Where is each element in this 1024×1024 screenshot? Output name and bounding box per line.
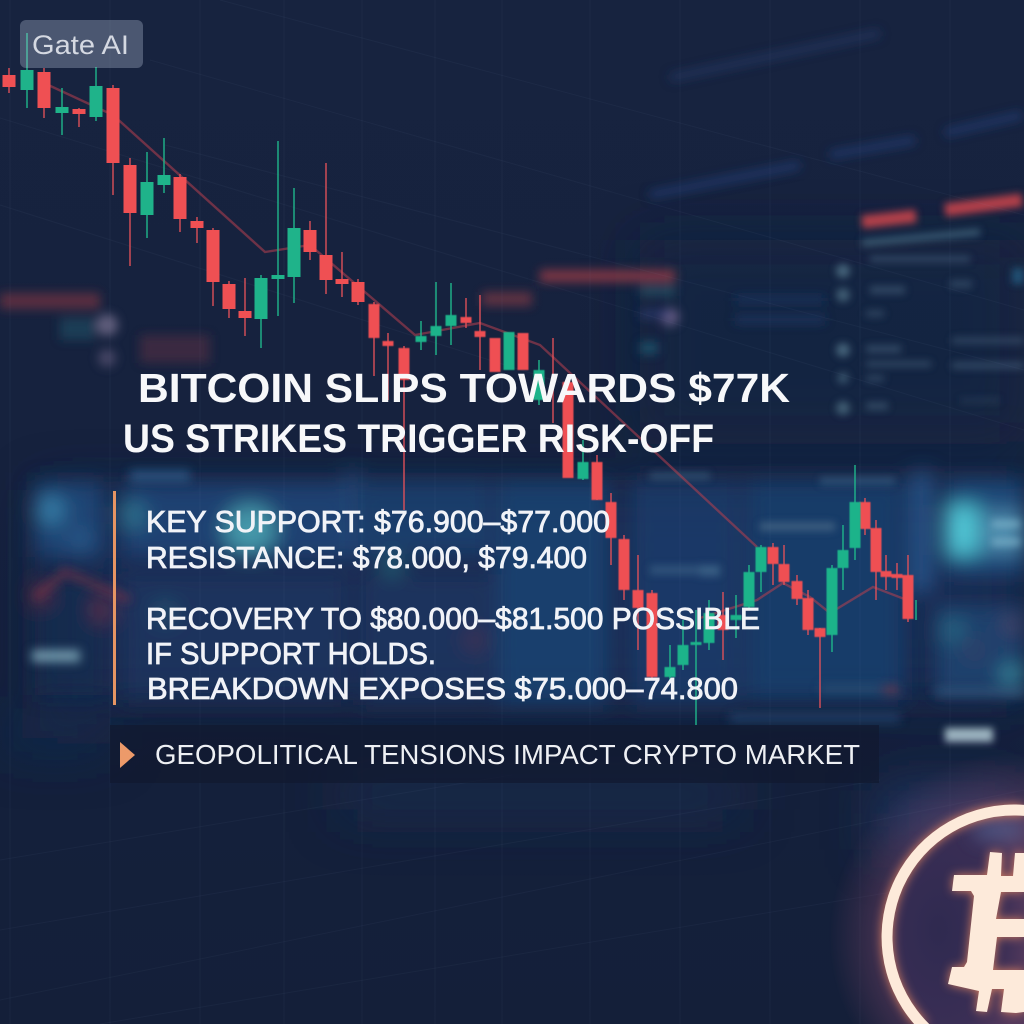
callout strip xyxy=(110,725,879,783)
watermark badge: Gate AI: Gate AI xyxy=(32,30,129,60)
recovery scenario: RECOVERY TO $80.000–$81.500 POSSIBLE xyxy=(146,601,760,636)
candle bodies: red small xyxy=(374,304,908,677)
candle wicks: red xyxy=(9,68,908,708)
key levels text block xyxy=(146,504,610,575)
scenario text block xyxy=(146,601,760,706)
candle bodies: green small xyxy=(421,315,855,677)
candle bodies: green large xyxy=(27,70,294,319)
bitcoin coin icon xyxy=(824,752,1024,1024)
headline line 1: BITCOIN SLIPS TOWARDS $77K xyxy=(138,365,790,411)
breakdown scenario: BREAKDOWN EXPOSES $75.000–74.800 xyxy=(147,671,738,706)
candle bodies: red large xyxy=(9,72,358,318)
moving average line xyxy=(44,83,907,618)
key support: KEY SUPPORT: $76.900–$77.000 xyxy=(146,504,610,539)
watermark badge: Gate AI xyxy=(20,20,143,68)
callout text: GEOPOLITICAL TENSIONS IMPACT CRYPTO MARKET xyxy=(155,739,860,770)
headline xyxy=(123,365,790,461)
resistance: RESISTANCE: $78.000, $79.400 xyxy=(146,540,587,575)
headline line 2: US STRIKES TRIGGER RISK-OFF xyxy=(123,417,714,461)
support condition: IF SUPPORT HOLDS. xyxy=(146,636,436,671)
icon: arrow marker xyxy=(120,742,135,768)
candlestick chart xyxy=(9,33,916,725)
candle wicks: green xyxy=(27,33,916,725)
accent rule xyxy=(113,491,116,705)
